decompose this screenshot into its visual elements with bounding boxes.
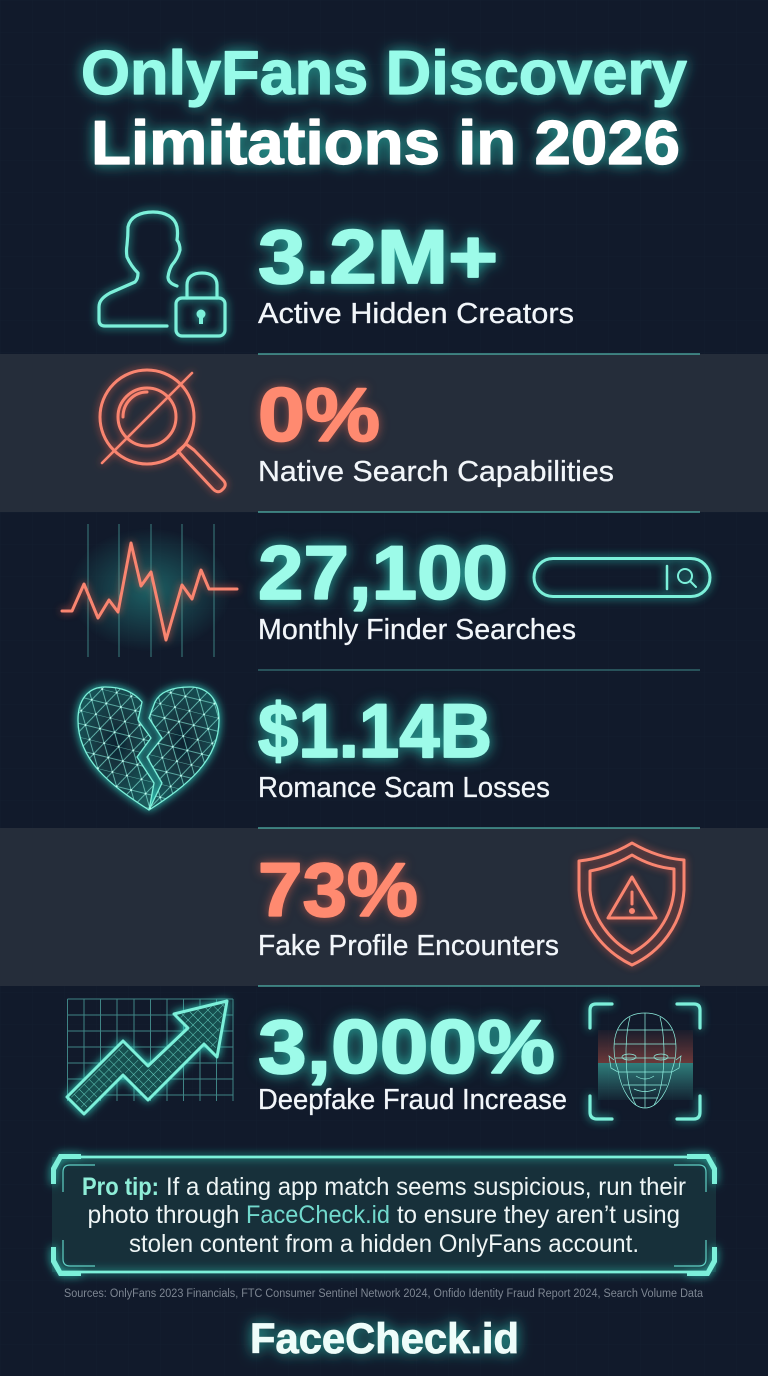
icon: face scan — [590, 1004, 700, 1119]
value: $1.14B: $1.14B — [258, 689, 492, 774]
pro tip text: stolen content from a hidden OnlyFans account. — [129, 1230, 639, 1258]
value: 3.2M+: 3.2M+ — [258, 215, 498, 300]
stat: monthly finder searches — [62, 524, 710, 657]
footer brand: FaceCheck.id — [250, 1315, 519, 1363]
icon: search bar — [534, 558, 710, 596]
stat: deepfake fraud increase — [67, 999, 700, 1119]
label: active hidden creators: Active Hidden Creators — [258, 298, 574, 330]
callout: pro tip — [51, 1154, 717, 1276]
pro tip text — [82, 1173, 686, 1258]
title: OnlyFans Discovery — [81, 39, 688, 108]
pro tip text: to ensure they aren’t using — [397, 1201, 680, 1229]
sources text: Sources: OnlyFans 2023 Financials, FTC Consumer Sentinel Network 2024, Onfido Identity Fraud Report 2024, Search Volume Data — [64, 1288, 704, 1300]
title: Limitations in 2026 — [91, 109, 680, 178]
title — [81, 39, 688, 178]
stat: fake profile encounters — [258, 843, 684, 965]
panel: native search band — [0, 354, 768, 512]
label: deepfake fraud increase: Deepfake Fraud Increase — [258, 1084, 567, 1116]
panel: fake profile band — [0, 828, 768, 986]
icon: crossed magnifier — [100, 370, 225, 492]
stat: romance scam losses — [78, 687, 550, 810]
value: 0%: 0% — [258, 373, 380, 458]
value: 27,100: 27,100 — [258, 531, 508, 616]
pro tip text: Pro tip: — [82, 1173, 159, 1201]
label: fake profile encounters: Fake Profile Encounters — [258, 930, 559, 962]
label: native search capabilities: Native Search Capabilities — [258, 456, 614, 488]
label: monthly finder searches: Monthly Finder Searches — [258, 614, 576, 646]
value: 3,000%: 3,000% — [258, 1005, 555, 1090]
pro tip text: photo through — [88, 1201, 240, 1229]
pro tip text: If a dating app match seems suspicious, run their — [166, 1173, 686, 1201]
value: 73%: 73% — [258, 848, 418, 933]
icon: user with padlock — [99, 212, 225, 336]
icon: warning shield — [579, 843, 684, 965]
icon: broken wireframe heart — [78, 687, 219, 810]
label: romance scam losses: Romance Scam Losses — [258, 772, 550, 804]
stat: native search — [100, 370, 614, 492]
pro tip text: FaceCheck.id — [246, 1201, 390, 1229]
icon: rising arrow on grid — [67, 999, 233, 1114]
stat: active hidden creators — [99, 212, 574, 336]
icon: pulse line chart — [62, 524, 237, 657]
